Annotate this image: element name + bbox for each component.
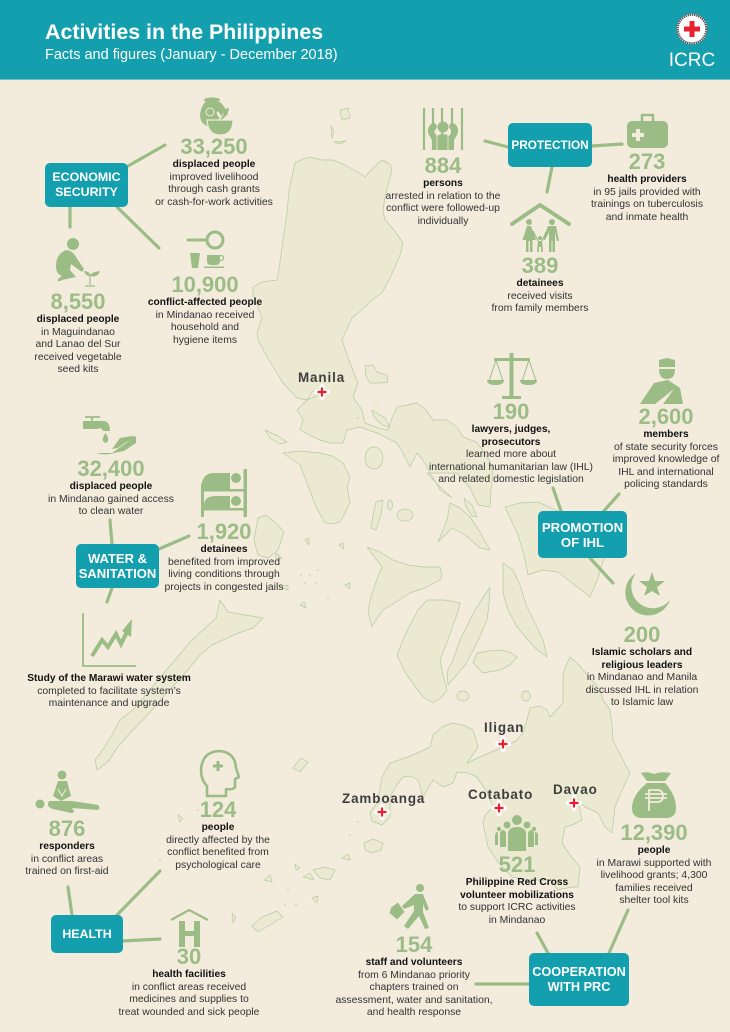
icon: scales of justice	[487, 353, 537, 399]
icon: person behind bars	[422, 108, 464, 150]
stat: 124 people	[148, 749, 288, 872]
category: Promotion of IHL: OF IHL	[561, 534, 604, 550]
Panay	[367, 547, 442, 627]
number: 32,400	[77, 456, 145, 481]
number: 30	[177, 944, 201, 969]
category: Health	[51, 915, 123, 953]
description: chapters trained on	[370, 982, 458, 993]
number: 521	[499, 852, 535, 877]
Bohol	[473, 650, 517, 673]
Sibuyan	[397, 509, 413, 521]
number: 2,600	[638, 404, 694, 429]
description: assessment, water and sanitation,	[335, 994, 493, 1006]
description: seed kits	[57, 364, 98, 375]
header banner	[0, 0, 730, 80]
description: improved knowledge of	[613, 454, 719, 465]
description: received vegetable	[34, 352, 122, 362]
description: people	[638, 845, 670, 856]
number: 884	[425, 153, 461, 178]
description	[148, 822, 288, 872]
stat: 33,250 displaced people	[155, 97, 273, 208]
description: in conflict areas received	[132, 982, 246, 992]
icon: head with plus	[148, 749, 288, 800]
Calamian	[254, 432, 284, 558]
description: detainees	[516, 278, 564, 289]
city label: Manila: Manila	[298, 370, 345, 385]
number: 10,900	[171, 272, 239, 297]
description: treat wounded and sick people	[119, 1006, 259, 1018]
description: in Mindanao	[489, 914, 545, 926]
title: Activities in the Philippines	[45, 20, 323, 44]
description	[164, 544, 284, 592]
description	[104, 969, 274, 1019]
description: and related domestic legislation	[438, 474, 584, 485]
icon: family under roof	[510, 203, 572, 252]
description	[25, 841, 109, 877]
number: 200	[624, 622, 660, 647]
stat: 521 Philippine Red Cross volunteer mobilizations	[442, 814, 592, 927]
stat: 32,400 displaced people	[48, 416, 174, 517]
category: Water and Sanitation: WATER &	[88, 551, 147, 566]
description: household and	[171, 322, 239, 333]
ICRC logo	[669, 13, 715, 68]
icon: group of people	[442, 814, 592, 855]
description: lawyers, judges,	[472, 424, 550, 435]
Lubang	[265, 430, 287, 444]
stat: 154 staff and volunteers	[329, 883, 499, 1020]
stat: 10,900 conflict-affected people	[148, 230, 262, 346]
description: health providers	[607, 174, 687, 185]
description: prosecutors	[482, 436, 540, 448]
icon: bunk bed	[201, 469, 247, 517]
description: in Mindanao and Manila	[587, 672, 697, 683]
description: trainings on tuberculosis	[591, 199, 703, 210]
stat: 884 persons	[386, 108, 500, 226]
stat: 2,600 members	[613, 358, 720, 490]
description: received visits	[507, 290, 573, 302]
description: volunteer mobilizations	[460, 890, 574, 900]
icon: money bag with peso sign	[579, 770, 729, 823]
category: Water and Sanitation: SANITATION	[79, 566, 156, 581]
description: in Maguindanao	[41, 326, 115, 338]
description: health facilities	[152, 969, 226, 980]
description: learned more about	[466, 449, 556, 460]
description: completed to facilitate system’s	[37, 686, 181, 696]
Romblon	[388, 500, 392, 510]
city label: Cotabato: Cotabato	[468, 787, 533, 802]
description: persons	[423, 178, 463, 189]
description: displaced people	[70, 481, 152, 492]
description: shelter tool kits	[619, 895, 689, 906]
stat: Study of the Marawi water system	[27, 613, 191, 709]
Marinduque	[365, 447, 383, 469]
description: hygiene items	[173, 334, 237, 346]
description: Study of the Marawi water system	[27, 673, 191, 684]
number: 33,250	[180, 134, 248, 159]
description: of state security forces	[614, 442, 718, 452]
number: 124	[200, 797, 236, 822]
Siquijor	[457, 691, 469, 701]
category: Promotion of IHL: PROMOTION	[542, 520, 623, 534]
description	[148, 297, 262, 346]
Mindanao	[370, 657, 630, 890]
stat: 200 Islamic scholars and religious leaders	[586, 572, 698, 708]
description	[591, 174, 703, 222]
description: livelihood grants; 4,300	[601, 870, 707, 881]
description: projects in congested jails	[164, 582, 283, 592]
description: members	[643, 429, 689, 440]
description: to clean water	[79, 506, 143, 517]
number: 12,390	[620, 820, 688, 845]
description: Islamic scholars and	[592, 647, 692, 658]
description: medicines and supplies to	[129, 994, 249, 1005]
category: Cooperation with PRC: COOPERATION	[532, 964, 626, 978]
Small islands	[178, 538, 350, 923]
Basilan	[364, 839, 383, 853]
stat: 8,550 displaced people	[34, 238, 122, 375]
description: psychological care	[175, 860, 261, 870]
description: responders	[39, 841, 95, 852]
number: 190	[493, 399, 529, 424]
Mindoro	[283, 451, 350, 524]
icon: money bag and bowl	[200, 97, 232, 134]
description: policing standards	[624, 479, 708, 490]
subtitle: Facts and figures (January - December 2018)	[45, 47, 338, 63]
description: Philippine Red Cross	[466, 877, 568, 888]
category: Water and Sanitation	[76, 544, 159, 588]
description	[34, 314, 122, 375]
category: Promotion of IHL	[538, 511, 627, 558]
description: conflict-affected people	[148, 297, 262, 308]
description: to support ICRC activities	[458, 902, 576, 913]
description: families received	[615, 882, 693, 894]
description	[329, 957, 499, 1020]
description: individually	[418, 216, 468, 226]
description: detainees	[200, 544, 248, 555]
description: in Mindanao gained access	[48, 494, 174, 504]
description: improved livelihood	[170, 172, 258, 182]
Camiguin	[522, 691, 530, 701]
description: conflict were followed-up	[386, 203, 500, 214]
description: in 95 jails provided with	[593, 186, 701, 198]
city label: Davao: Davao	[553, 782, 598, 797]
Cebu	[447, 587, 490, 685]
category: Health: HEALTH	[62, 926, 112, 940]
description	[613, 429, 720, 490]
icon: rising line chart	[82, 613, 136, 667]
description	[586, 647, 698, 708]
description	[492, 278, 588, 314]
description	[386, 178, 500, 226]
Leyte	[503, 563, 547, 657]
Tablas	[371, 500, 383, 530]
description: or cash-for-work activities	[155, 196, 273, 208]
category: Economic Security: ECONOMIC	[52, 170, 121, 184]
Palawan	[95, 600, 263, 770]
category: Cooperation with PRC: WITH PRC	[548, 980, 610, 994]
number: 8,550	[50, 289, 106, 314]
city label: Zamboanga: Zamboanga	[342, 791, 425, 806]
category: Economic Security: SECURITY	[55, 185, 118, 199]
category: Cooperation with PRC	[529, 953, 629, 1006]
Samar	[505, 502, 605, 597]
description	[155, 159, 273, 208]
Babuyan	[331, 108, 350, 144]
stat: 273 health providers	[591, 114, 703, 222]
description: international humanitarian law (IHL)	[429, 462, 593, 472]
description: displaced people	[37, 314, 119, 325]
Luzon	[253, 157, 493, 507]
description: in Mindanao received	[156, 310, 254, 320]
description: people	[202, 822, 234, 833]
icon: first aid kit	[627, 114, 668, 148]
number: 389	[522, 253, 558, 278]
icon: crescent and star	[625, 572, 670, 616]
description: in conflict areas	[31, 854, 103, 864]
icon: H under roof	[104, 908, 274, 947]
Jolo group	[252, 867, 335, 932]
description: staff and volunteers	[366, 957, 462, 968]
description: benefited from improved	[168, 556, 280, 568]
description: arrested in relation to the	[386, 190, 500, 202]
description	[442, 877, 592, 927]
description: trained on first-aid	[25, 866, 109, 877]
category: Economic Security	[45, 163, 128, 207]
description: and inmate health	[606, 212, 688, 222]
description: religious leaders	[602, 660, 682, 670]
description: conflict benefited from	[167, 847, 269, 858]
Ticao	[464, 498, 477, 517]
description: living conditions through	[168, 569, 280, 580]
description	[48, 481, 174, 517]
stat: 190 lawyers, judges, prosecutors	[429, 353, 593, 485]
number: 876	[49, 816, 85, 841]
category: Protection	[508, 123, 592, 167]
Masbate	[438, 503, 490, 550]
stat: 389 detainees	[492, 203, 588, 314]
icon: pan, glass and cup	[186, 230, 224, 268]
stat: 1,920 detainees	[164, 469, 284, 592]
description: discussed IHL in relation	[586, 684, 698, 696]
description: through cash grants	[168, 184, 260, 195]
description: from 6 Mindanao priority	[358, 970, 470, 980]
city label: Iligan: Iligan	[484, 720, 524, 735]
description: from family members	[492, 303, 588, 314]
stat: 30 health facilities	[104, 908, 274, 1019]
stat: 876 responders	[25, 770, 109, 877]
Polillo	[365, 365, 388, 383]
description: maintenance and upgrade	[49, 698, 169, 709]
description: and health response	[367, 1007, 461, 1018]
description: directly affected by the	[166, 834, 270, 846]
number: 1,920	[196, 519, 252, 544]
number: 273	[629, 149, 665, 174]
icon: walking person with bag	[329, 883, 499, 935]
icon: uniformed officer	[640, 358, 683, 404]
Negros	[397, 600, 460, 703]
description	[579, 845, 729, 908]
description: IHL and international	[618, 466, 714, 478]
description: and Lanao del Sur	[36, 339, 120, 350]
stat: 12,390 people	[579, 770, 729, 908]
description	[429, 424, 593, 485]
description: displaced people	[173, 159, 255, 170]
description	[27, 673, 191, 709]
description: in Marawi supported with	[597, 858, 711, 868]
description: to Islamic law	[611, 697, 673, 708]
icon: water tap and hand	[83, 416, 136, 454]
category: Protection: PROTECTION	[511, 138, 589, 152]
icon: CPR first-aid	[36, 770, 100, 813]
icon: person planting seedling	[56, 238, 100, 287]
Catanduanes strip	[372, 410, 390, 427]
number: 154	[396, 932, 432, 957]
